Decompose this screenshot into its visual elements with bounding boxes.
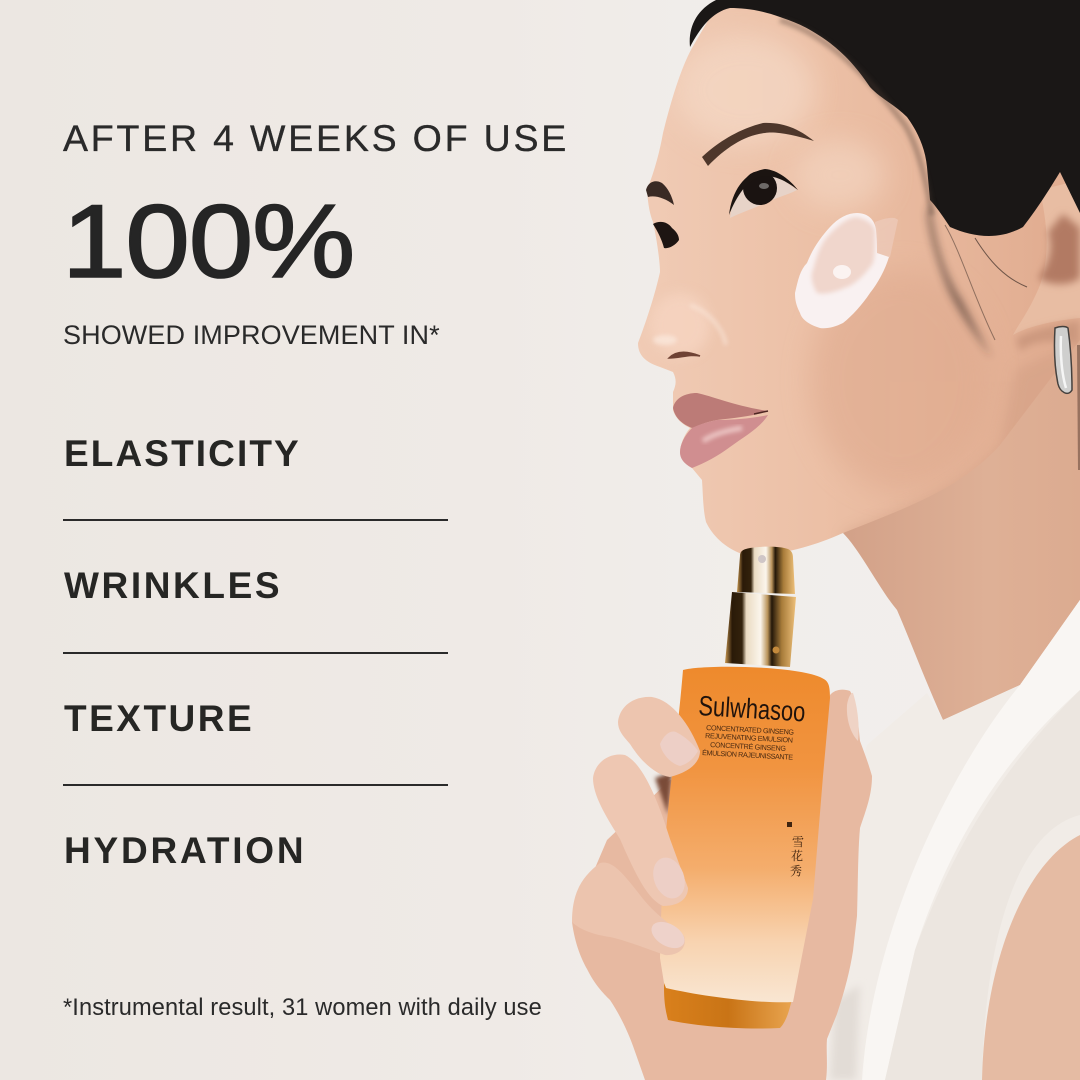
gap shadow between fingers [655,772,672,815]
vertical emblem on bottle: 花 [791,847,803,864]
index finger [618,697,700,777]
footnote: *Instrumental result, 31 women with daily use [63,995,542,1021]
product text on bottle: CONCENTRATED GINSENG [706,723,795,737]
brand name on bottle: Sulwhasoo [698,690,806,728]
pump collar [725,592,796,667]
eye near [729,169,798,218]
garment: white top [826,600,1080,1080]
ring finger [572,863,685,955]
heading: AFTER 4 WEEKS OF USE [63,117,569,159]
hand back: palm and thumb [572,690,872,1080]
product text on bottle [702,723,795,762]
product text on bottle: ÉMULSION RAJEUNISSANTE [702,748,793,762]
face [630,0,1080,560]
subheading: SHOWED IMPROVEMENT IN* [63,320,440,350]
earring [1054,326,1072,393]
product text on bottle: REJUVENATING EMULSION [705,731,793,745]
pump upper [737,547,795,594]
neck and chest [843,330,1080,720]
eye far [653,222,679,248]
photo: woman holding emulsion bottle [572,0,1080,1080]
item: wrinkles: WRINKLES [64,565,282,606]
ring nail [647,916,689,954]
item: hydration: HYDRATION [64,830,306,871]
lips [673,393,768,468]
big stat: 100% [62,184,354,300]
bottle body [660,667,830,1002]
arm [982,835,1080,1080]
eyebrow near [702,123,814,166]
hair [690,0,1080,358]
vertical emblem on bottle: 秀 [790,862,802,879]
vertical emblem on bottle: 雪 [792,833,804,850]
middle nail [648,853,690,903]
eyebrow far [646,181,674,205]
index nail [660,732,698,766]
item: texture: TEXTURE [64,698,254,739]
nostril [669,352,700,358]
bottle [660,547,830,1029]
cream swatch on cheek [795,213,898,328]
ear [1013,180,1080,335]
item: elasticity: ELASTICITY [64,433,301,474]
bottle base glass [664,983,793,1029]
front fingers [572,697,700,955]
middle finger [593,754,688,906]
product text on bottle: CONCENTRÉ GINSENG [710,740,787,753]
benefits list [63,433,448,871]
thumb nail [847,693,859,741]
